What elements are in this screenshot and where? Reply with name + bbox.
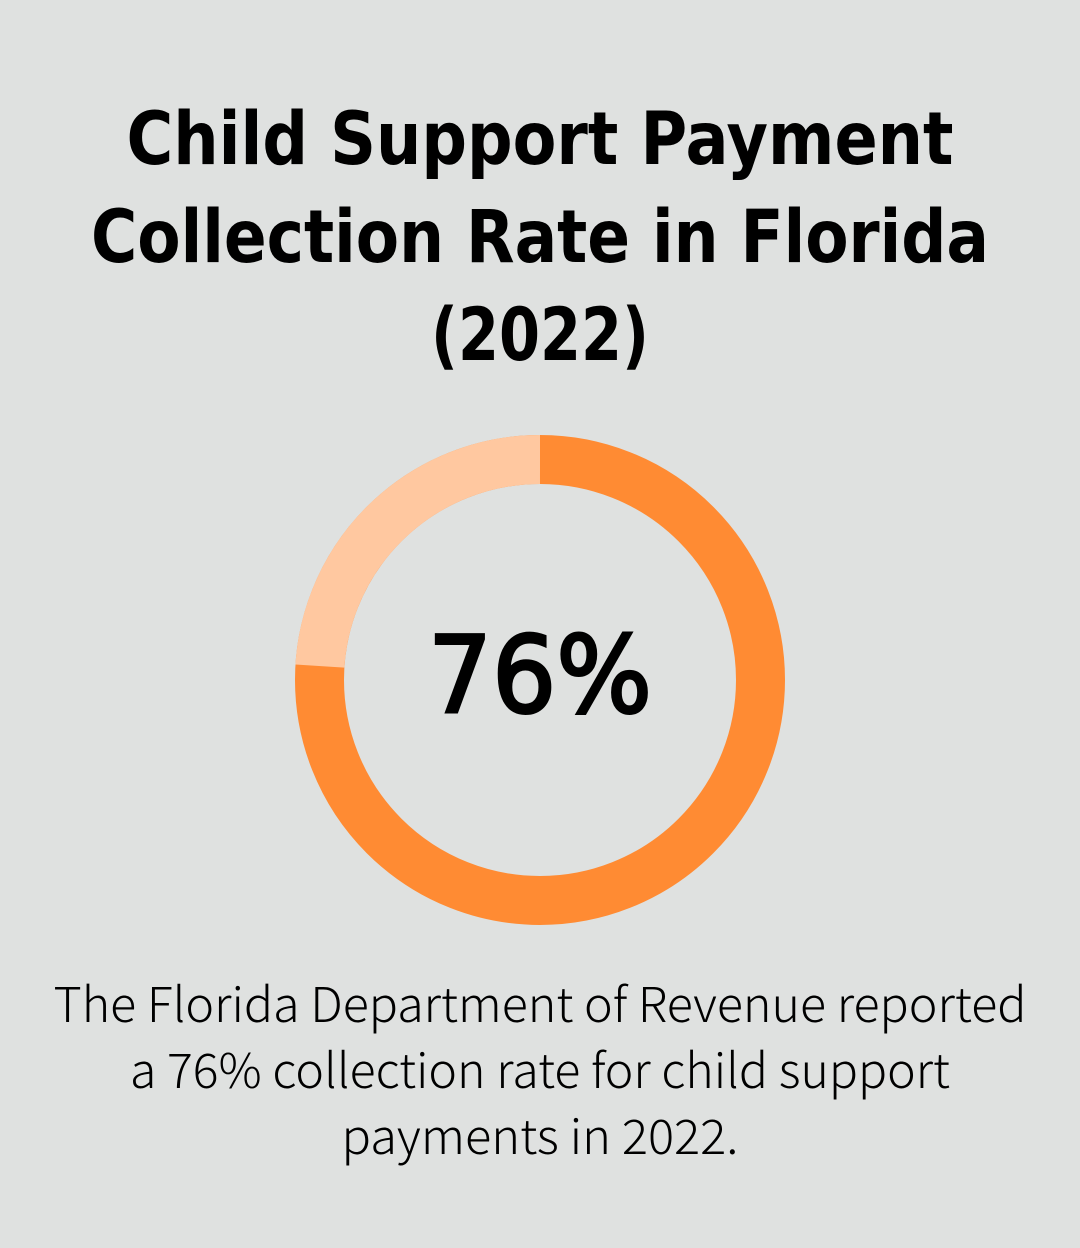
description text	[54, 966, 1026, 1168]
full ring: collected share	[320, 460, 760, 900]
title	[91, 97, 989, 378]
title: (2022)	[431, 293, 649, 378]
description text: The Florida Department of Revenue reported	[54, 966, 1026, 1036]
center value: 76%	[428, 614, 652, 737]
title: Child Support Payment	[126, 97, 954, 182]
description text: a 76% collection rate for child support	[130, 1032, 950, 1102]
donut chart: 76% collection rate	[320, 460, 760, 900]
remaining share	[320, 460, 540, 666]
description text: payments in 2022.	[342, 1098, 738, 1168]
